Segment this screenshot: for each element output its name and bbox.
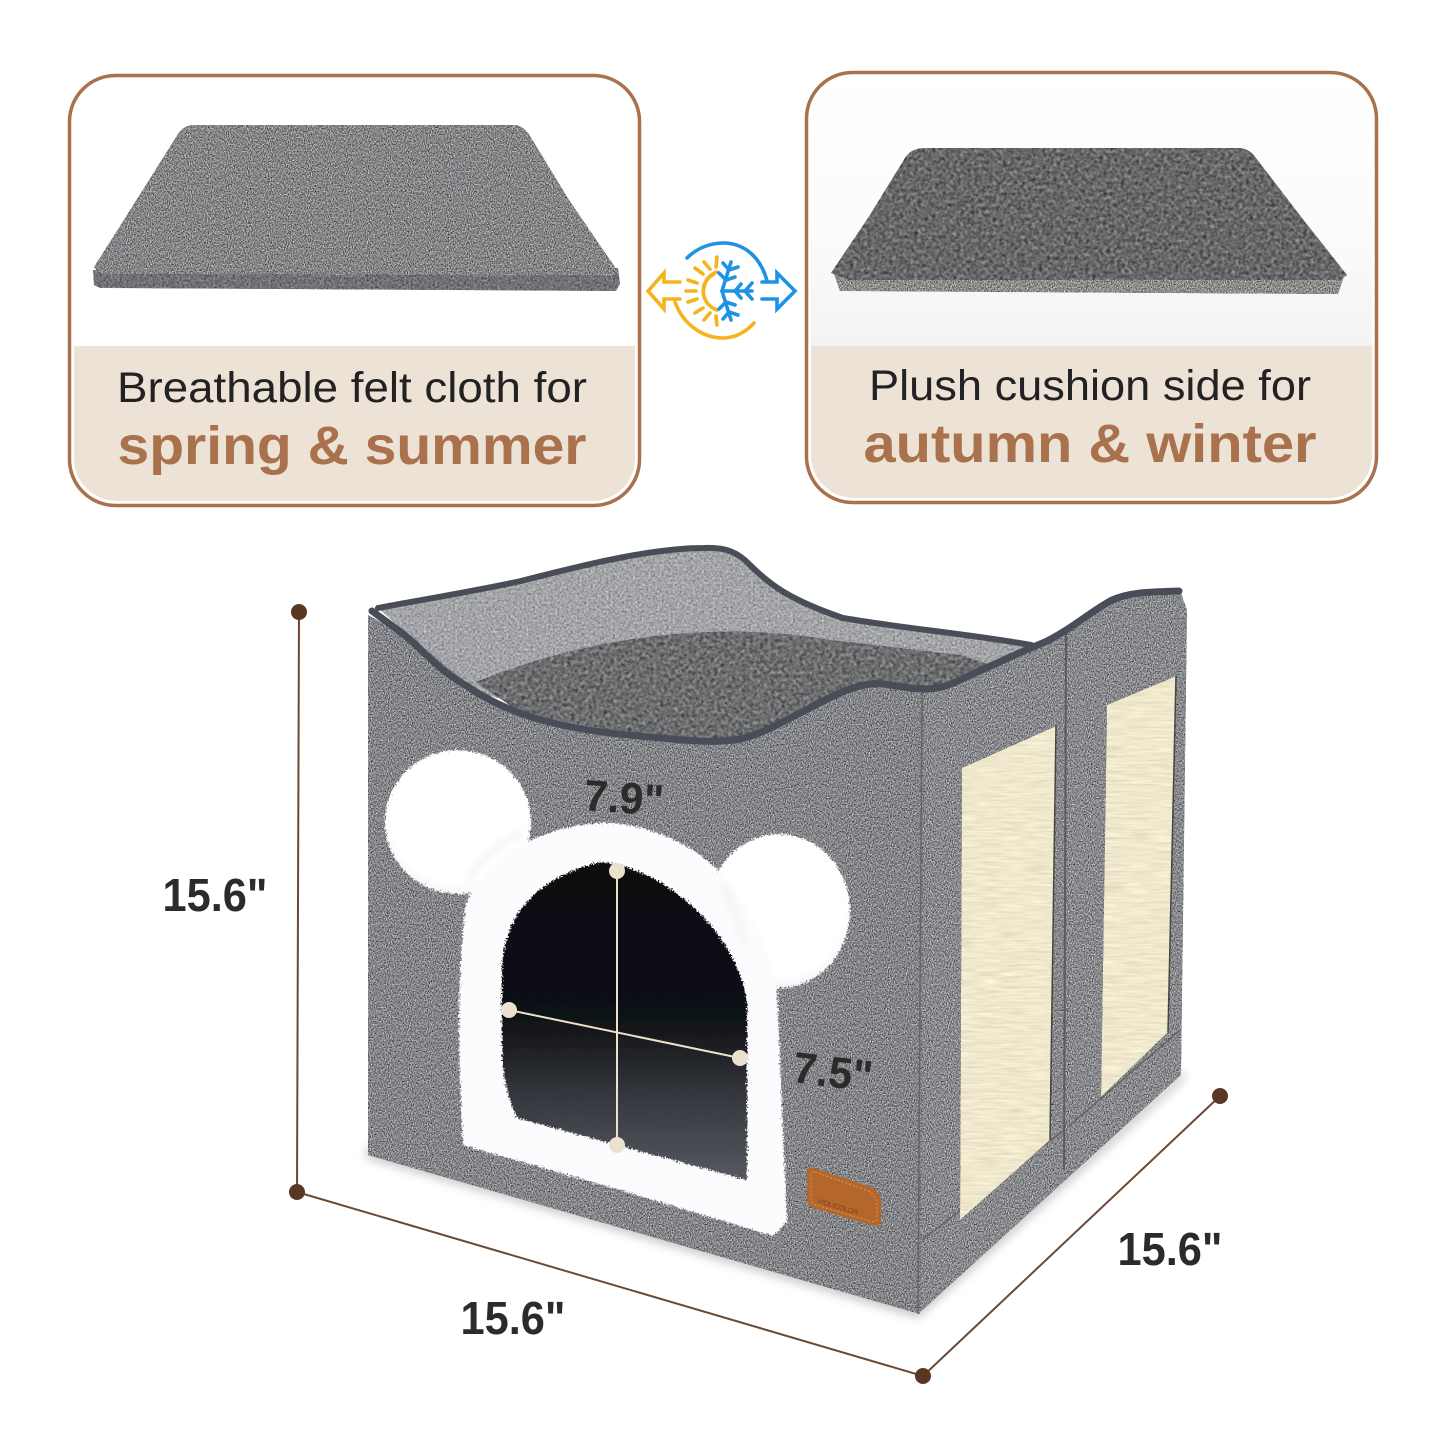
ear creases	[468, 834, 745, 945]
end dot: front left	[289, 1184, 305, 1200]
ground shadow	[366, 1070, 1184, 1318]
back inner felt wall	[378, 548, 1179, 733]
right bear ear	[708, 834, 850, 988]
cat house product illustration	[366, 548, 1187, 1318]
dot: door top	[609, 863, 625, 879]
caption: breathable felt cloth: Breathable felt cloth for	[117, 364, 587, 412]
label: door depth: 7.5"	[790, 1043, 876, 1102]
left bear ear	[385, 750, 531, 894]
dimension lines	[289, 604, 1228, 1384]
dot: door left	[501, 1002, 517, 1018]
rim binding	[372, 548, 1179, 741]
caption: plush cushion side: Plush cushion side for	[869, 362, 1311, 410]
door opening	[502, 862, 747, 1180]
door measurement lines	[501, 863, 748, 1153]
dot: door bottom	[609, 1137, 625, 1153]
end dot: front right	[915, 1368, 931, 1384]
caption band	[74, 346, 635, 501]
door fur trim	[459, 823, 787, 1236]
corner seam	[918, 690, 922, 1314]
label: height: 15.6"	[162, 869, 268, 921]
end dot: height top	[291, 604, 307, 620]
front face	[368, 615, 924, 1314]
icon: reversible season switch	[648, 243, 795, 338]
caption band	[811, 346, 1372, 498]
tag stitching	[811, 1172, 877, 1222]
caption highlight: autumn and winter: autumn & winter	[864, 414, 1316, 474]
sisal scratch pad: rear	[1101, 676, 1176, 1097]
scratch pad rear edge stitch	[1168, 676, 1176, 1032]
height line	[297, 612, 299, 1192]
photo: felt cloth cushion	[93, 125, 620, 291]
right side face	[918, 590, 1187, 1314]
side panel seam	[1064, 632, 1066, 1170]
panel: spring and summer cushion side	[70, 76, 640, 506]
label: width: 15.6"	[460, 1292, 566, 1344]
depth line	[923, 1096, 1220, 1376]
icon part: cold side	[687, 243, 795, 320]
upper bed cushion	[476, 632, 1000, 742]
dot: door right	[732, 1050, 748, 1066]
scratch pad front edge stitch	[1050, 726, 1056, 1140]
label: door width top: 7.9"	[582, 771, 666, 826]
panel: autumn and winter cushion side	[806, 72, 1376, 502]
sisal scratch pad: front	[960, 726, 1056, 1220]
photo backdrop	[811, 76, 1372, 346]
tag text: HOLICOLOR	[817, 1198, 859, 1217]
label: depth: 15.6"	[1118, 1223, 1222, 1275]
icon part: warm side	[648, 257, 754, 338]
width line	[297, 1192, 923, 1376]
door width line	[509, 1010, 740, 1058]
caption highlight: spring and summer: spring & summer	[118, 416, 586, 476]
door height line	[616, 871, 618, 1145]
end dot: back right	[1212, 1088, 1228, 1104]
front rim	[372, 591, 1179, 741]
leather brand tag	[807, 1168, 881, 1226]
photo: plush cushion	[831, 148, 1347, 294]
base fold seam	[922, 1030, 1180, 1240]
back rim	[378, 548, 1031, 645]
